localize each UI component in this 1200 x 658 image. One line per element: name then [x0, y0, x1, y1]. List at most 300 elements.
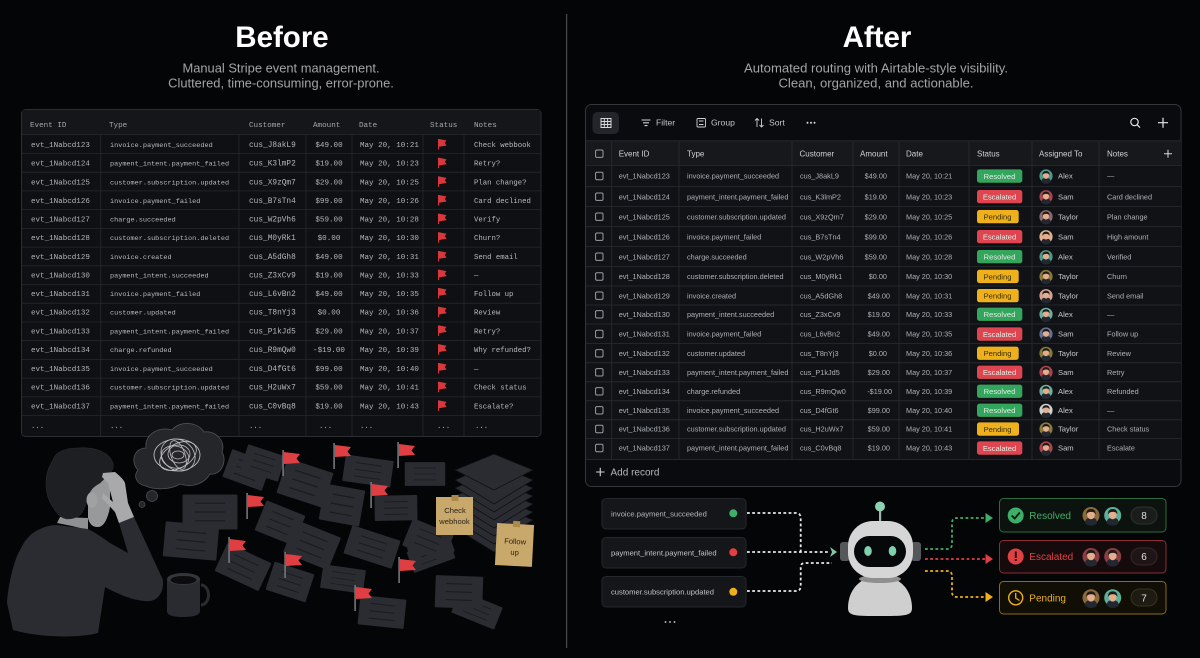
- record 127: May 20, 10:28: [906, 252, 952, 261]
- record 124: Sam: [1058, 192, 1074, 201]
- record 125: May 20, 10:25: [906, 212, 952, 221]
- row 125: Plan change?: [474, 179, 527, 187]
- row 125: evt_1Nabcd125: [31, 179, 90, 187]
- record 135: evt_1Nabcd135: [619, 406, 670, 415]
- hair: [46, 448, 113, 519]
- row 123: invoice.payment_succeeded: [110, 142, 213, 150]
- record 134: Resolved: [984, 387, 1015, 396]
- row 135: invoice.payment_succeeded: [110, 366, 213, 374]
- head: [848, 521, 913, 578]
- row 123: cus_J8akL9: [249, 142, 296, 150]
- row 127: Verify: [474, 217, 501, 225]
- row 123: May 20, 10:21: [360, 142, 419, 150]
- record 130: —: [1107, 310, 1115, 319]
- record 126: Sam: [1058, 232, 1074, 241]
- subtitle: After: Automated routing with Airtable-style visibility.: [744, 60, 1008, 76]
- row 131: evt_1Nabcd131: [31, 291, 90, 299]
- row 127: cus_W2pVh6: [249, 217, 296, 225]
- subtitle: After: [744, 60, 1008, 90]
- event chip: customer.subscription.updated: customer.subscription.updated: [611, 588, 714, 596]
- hand on head: [102, 472, 134, 523]
- row 128: $0.00: [318, 235, 341, 243]
- row 134: Why refunded?: [474, 347, 531, 355]
- toolbar: [592, 112, 1168, 134]
- row 130: evt_1Nabcd130: [31, 273, 90, 281]
- row 130: payment_intent.succeeded: [110, 273, 209, 281]
- eyes: [864, 546, 896, 556]
- record 128: Pending: [984, 272, 1011, 281]
- record 128: Taylor: [1058, 272, 1079, 281]
- row 131: $49.00: [315, 291, 343, 299]
- routing arrow: resolved: [925, 513, 993, 549]
- row 132: customer.updated: [110, 310, 176, 318]
- row 135: $99.00: [315, 366, 343, 374]
- row 135: cus_D4fGt6: [249, 366, 296, 374]
- record 128: evt_1Nabcd128: [619, 272, 670, 281]
- row 126: invoice.payment_failed: [110, 198, 200, 206]
- flags: [228, 442, 416, 611]
- row 129: Send email: [474, 254, 518, 262]
- arrow into robot: [830, 547, 837, 557]
- row 125: [31, 176, 527, 187]
- event chip: customer.subscription.updated: [602, 576, 746, 607]
- record 136: cus_H2uWx7: [800, 425, 843, 434]
- record 136: Taylor: [1058, 425, 1079, 434]
- truncated row: ...: [319, 423, 332, 431]
- row 133: evt_1Nabcd133: [31, 328, 90, 336]
- face: [88, 477, 110, 527]
- scribble in cloud: [154, 432, 201, 478]
- record 135: invoice.payment_succeeded: [687, 406, 779, 415]
- row 132: Review: [474, 310, 501, 318]
- sticky note: check webhook: [436, 495, 473, 535]
- record 137: Escalated: [983, 444, 1016, 453]
- outcome card: escalated: Escalated: [1029, 552, 1073, 563]
- record 124: payment_intent.payment_failed: [687, 192, 788, 201]
- record 123: Resolved: [984, 172, 1015, 181]
- record 131: Escalated: [983, 330, 1016, 339]
- record 132: $0.00: [869, 349, 887, 358]
- record 126: $99.00: [865, 232, 887, 241]
- record 136: May 20, 10:41: [906, 425, 952, 434]
- row 137: $19.00: [315, 403, 343, 411]
- row 131: [31, 288, 513, 299]
- table: Airtable-style view: [586, 104, 1181, 486]
- subtitle: Before: Manual Stripe event management.: [182, 60, 380, 76]
- illustration: stressed person: [7, 423, 224, 636]
- row 132: [31, 307, 501, 318]
- row 133: May 20, 10:37: [360, 328, 419, 336]
- row 126: evt_1Nabcd126: [31, 198, 90, 206]
- row 123: $49.00: [315, 142, 343, 150]
- row 123: Check webbook: [474, 142, 532, 150]
- record 135: Resolved: [984, 406, 1015, 415]
- filter control: [642, 118, 675, 128]
- outcome card: pending: Pending: [1029, 593, 1066, 604]
- row 127: charge.succeeded: [110, 217, 176, 225]
- table header row: Customer: [800, 150, 835, 159]
- robot: [840, 502, 921, 616]
- row 125: customer.subscription.updated: [110, 179, 229, 187]
- record 135: Alex: [1058, 406, 1073, 415]
- record 129: $49.00: [868, 291, 890, 300]
- record 134: cus_R9mQw0: [800, 387, 846, 396]
- row 137: Escalate?: [474, 403, 513, 411]
- record 133: [596, 366, 1125, 380]
- record 127: $59.00: [865, 252, 887, 261]
- row 137: cus_C0vBq8: [249, 403, 296, 411]
- sticky note: follow up: up: [510, 548, 519, 557]
- row 130: May 20, 10:33: [360, 273, 419, 281]
- row 134: May 20, 10:39: [360, 347, 419, 355]
- table header row: Event ID: [30, 122, 67, 130]
- record 128: May 20, 10:30: [906, 272, 952, 281]
- row 124: evt_1Nabcd124: [31, 161, 90, 169]
- record 124: [596, 190, 1152, 205]
- row 133: Retry?: [474, 328, 500, 336]
- record 132: Review: [1107, 349, 1132, 358]
- row 131: cus_L6vBn2: [249, 291, 296, 299]
- record 130: May 20, 10:33: [906, 310, 952, 319]
- record 136: [596, 422, 1150, 437]
- row 129: [31, 251, 518, 262]
- outcome card: pending: [1000, 582, 1166, 614]
- record 131: evt_1Nabcd131: [619, 330, 670, 339]
- record 131: Sam: [1058, 330, 1074, 339]
- more events ellipsis: [665, 621, 675, 623]
- row 123: evt_1Nabcd123: [31, 142, 90, 150]
- subtitle: Before: [168, 60, 394, 90]
- record 125: $29.00: [865, 212, 887, 221]
- record 124: cus_K3lmP2: [800, 192, 841, 201]
- row 134: evt_1Nabcd134: [31, 347, 90, 355]
- truncated row: ...: [475, 423, 488, 431]
- record 128: [596, 270, 1127, 284]
- record 130: Resolved: [984, 310, 1015, 319]
- record 123: evt_1Nabcd123: [619, 172, 670, 181]
- row 136: customer.subscription.updated: [110, 385, 229, 393]
- row 124: cus_K3lmP2: [249, 161, 296, 169]
- record 125: evt_1Nabcd125: [619, 212, 670, 221]
- routing arrow: pending: [925, 571, 993, 602]
- row 133: cus_P1kJd5: [249, 328, 296, 336]
- record 128: Churn: [1107, 272, 1127, 281]
- record 123: Alex: [1058, 172, 1073, 181]
- row 125: $29.00: [315, 179, 343, 187]
- row 127: [31, 214, 501, 225]
- heading: After: After: [843, 21, 912, 54]
- row 132: $0.00: [318, 310, 341, 318]
- record 127: cus_W2pVh6: [800, 252, 843, 261]
- record 130: payment_intent.succeeded: [687, 310, 774, 319]
- record 125: Plan change: [1107, 212, 1148, 221]
- record 134: Refunded: [1107, 387, 1139, 396]
- row 125: cus_X9zQm7: [249, 179, 296, 187]
- body: [848, 576, 912, 616]
- record 135: May 20, 10:40: [906, 406, 952, 415]
- truncated row: [31, 423, 488, 431]
- row 136: $59.00: [315, 385, 343, 393]
- sticky note: follow up: Follow: [504, 536, 527, 547]
- record 125: [596, 210, 1148, 225]
- record 123: cus_J8akL9: [800, 172, 839, 181]
- record 134: -$19.00: [867, 387, 892, 396]
- record 129: cus_A5dGh8: [800, 291, 842, 300]
- record 134: evt_1Nabcd134: [619, 387, 670, 396]
- record 137: Sam: [1058, 444, 1074, 453]
- row 129: May 20, 10:31: [360, 254, 419, 262]
- group control: Group: [711, 118, 735, 128]
- record 132: Pending: [984, 349, 1011, 358]
- row 128: customer.subscription.deleted: [110, 235, 229, 243]
- ears: [840, 542, 921, 561]
- row 128: cus_M0yRk1: [249, 235, 296, 243]
- row 125: May 20, 10:25: [360, 179, 419, 187]
- record 129: May 20, 10:31: [906, 291, 952, 300]
- record 130: cus_Z3xCv9: [800, 310, 841, 319]
- record 133: cus_P1kJd5: [800, 368, 840, 377]
- row 124: May 20, 10:23: [360, 161, 419, 169]
- record 133: Retry: [1107, 368, 1125, 377]
- row 126: May 20, 10:26: [360, 198, 419, 206]
- row 127: May 20, 10:28: [360, 217, 419, 225]
- record 132: cus_T8nYj3: [800, 349, 839, 358]
- record 127: Verified: [1107, 252, 1131, 261]
- record 127: Alex: [1058, 252, 1073, 261]
- record 137: May 20, 10:43: [906, 444, 952, 453]
- event chip: invoice.payment_succeeded: invoice.payment_succeeded: [611, 510, 707, 518]
- table header row: Date: [906, 150, 923, 159]
- grid view button: [592, 112, 619, 134]
- table header row: Notes: [474, 122, 497, 130]
- record 127: charge.succeeded: [687, 252, 747, 261]
- outcome card: resolved: 8: [1141, 511, 1147, 522]
- filter control: Filter: [656, 118, 675, 128]
- record 133: payment_intent.payment_failed: [687, 368, 788, 377]
- record 130: $19.00: [868, 310, 890, 319]
- record 126: High amount: [1107, 232, 1148, 241]
- record 129: Pending: [984, 292, 1011, 300]
- record 126: May 20, 10:26: [906, 232, 952, 241]
- outcome card: resolved: [1000, 498, 1166, 532]
- visor: [854, 536, 906, 567]
- record 128: cus_M0yRk1: [800, 272, 842, 281]
- table: manual event log: [22, 110, 541, 436]
- record 123: —: [1107, 172, 1115, 181]
- record 127: [596, 250, 1131, 265]
- record 134: May 20, 10:39: [906, 387, 952, 396]
- neck shadow: [859, 575, 901, 583]
- record 125: Pending: [984, 212, 1011, 222]
- record 132: Taylor: [1058, 349, 1079, 358]
- record 130: evt_1Nabcd130: [619, 310, 670, 319]
- row 128: Churn?: [474, 235, 500, 243]
- record 130: [596, 308, 1115, 322]
- row 129: evt_1Nabcd129: [31, 254, 90, 262]
- sort control: [755, 118, 785, 128]
- record 133: May 20, 10:37: [906, 368, 952, 377]
- record 126: [596, 230, 1148, 245]
- row 130: —: [473, 273, 479, 281]
- row 134: [31, 344, 531, 355]
- record 137: payment_intent.payment_failed: [687, 444, 788, 453]
- row 129: cus_A5dGh8: [249, 254, 296, 262]
- record 133: evt_1Nabcd133: [619, 368, 670, 377]
- record 136: Check status: [1107, 425, 1150, 434]
- neck: [57, 517, 88, 530]
- record 123: [596, 169, 1115, 184]
- record 123: May 20, 10:21: [906, 172, 952, 181]
- row 134: -$19.00: [313, 347, 345, 355]
- record 133: $29.00: [868, 368, 890, 377]
- table header row: [30, 122, 497, 130]
- record 124: Card declined: [1107, 192, 1152, 201]
- record 131: May 20, 10:35: [906, 330, 952, 339]
- outcome card: pending: 7: [1141, 593, 1147, 604]
- ear: [86, 492, 98, 508]
- sticky note: check webhook: webhook: [438, 517, 470, 526]
- record 125: Taylor: [1058, 212, 1079, 221]
- table header row: Assigned To: [1039, 150, 1083, 159]
- event chip: payment_intent.payment_failed: [602, 538, 746, 568]
- row 133: $29.00: [315, 328, 343, 336]
- row 128: May 20, 10:30: [360, 235, 419, 243]
- record 135: [596, 404, 1115, 418]
- event chip: payment_intent.payment_failed: payment_intent.payment_failed: [611, 548, 717, 558]
- record 137: cus_C0vBq8: [800, 444, 841, 453]
- record 133: Escalated: [983, 368, 1016, 377]
- record 131: invoice.payment_failed: [687, 330, 761, 339]
- row 129: $49.00: [315, 254, 343, 262]
- row 134: charge.refunded: [110, 347, 172, 355]
- row 135: evt_1Nabcd135: [31, 366, 90, 374]
- truncated row: ...: [110, 423, 123, 431]
- row 124: $19.00: [315, 161, 343, 169]
- table header row: Type: [109, 122, 128, 130]
- row 128: [31, 232, 500, 243]
- record 129: invoice.created: [687, 291, 736, 300]
- record 135: $99.00: [868, 406, 890, 415]
- row 132: evt_1Nabcd132: [31, 310, 90, 318]
- table header row: Status: [430, 122, 457, 130]
- row 133: [31, 325, 500, 336]
- record 137: [596, 441, 1135, 456]
- routing arrow: escalated: [925, 554, 993, 564]
- row 127: evt_1Nabcd127: [31, 217, 90, 225]
- record 127: evt_1Nabcd127: [619, 252, 670, 261]
- sort control: Sort: [769, 118, 785, 128]
- truncated row: ...: [249, 423, 262, 431]
- record 128: $0.00: [869, 272, 887, 281]
- record 131: $49.00: [868, 330, 890, 339]
- outcome card: escalated: [1000, 540, 1166, 573]
- more menu: [806, 122, 816, 124]
- paper scatter: [163, 444, 503, 630]
- row 135: May 20, 10:40: [360, 366, 419, 374]
- row 136: May 20, 10:41: [360, 385, 419, 393]
- row 130: $19.00: [315, 273, 343, 281]
- row 133: payment_intent.payment_failed: [110, 328, 229, 336]
- record 132: customer.updated: [687, 349, 745, 358]
- sticky note: check webhook: Check: [444, 506, 466, 515]
- record 137: $19.00: [868, 444, 890, 453]
- record 133: Sam: [1058, 368, 1074, 377]
- row 135: [31, 363, 479, 374]
- row 132: May 20, 10:36: [360, 310, 419, 318]
- thought bubbles: [139, 490, 158, 508]
- row 137: payment_intent.payment_failed: [110, 403, 229, 411]
- row 129: invoice.created: [110, 254, 172, 262]
- record 124: May 20, 10:23: [906, 192, 952, 201]
- row 124: payment_intent.payment_failed: [110, 161, 229, 169]
- row 131: invoice.payment_failed: [110, 291, 200, 299]
- record 127: Resolved: [984, 252, 1015, 262]
- row 137: evt_1Nabcd137: [31, 403, 90, 411]
- record 136: customer.subscription.updated: [687, 425, 786, 434]
- row 124: Retry?: [474, 161, 500, 169]
- table header row: Date: [359, 122, 378, 130]
- record 137: evt_1Nabcd137: [619, 444, 670, 453]
- record 129: Taylor: [1058, 291, 1079, 300]
- row 130: cus_Z3xCv9: [249, 273, 296, 281]
- event chip: invoice.payment_succeeded: [602, 498, 746, 529]
- record 129: Send email: [1107, 291, 1144, 300]
- group control: [697, 118, 735, 128]
- row 126: Card declined: [474, 198, 531, 206]
- table header row: Type: [687, 150, 705, 159]
- thought cloud: [134, 423, 224, 489]
- add icon: [1158, 118, 1168, 128]
- record 134: charge.refunded: [687, 387, 740, 396]
- record 126: invoice.payment_failed: [687, 232, 761, 241]
- row 130: [31, 270, 479, 281]
- table header row: Status: [977, 150, 1000, 159]
- row 131: Follow up: [474, 291, 513, 299]
- row 135: —: [473, 366, 479, 374]
- table header row: Event ID: [619, 150, 650, 159]
- row 126: [31, 195, 531, 206]
- outcome card: resolved: Resolved: [1029, 511, 1071, 522]
- truncated row: ...: [31, 423, 44, 431]
- table header row: Notes: [1107, 150, 1128, 159]
- record 126: Escalated: [983, 232, 1016, 242]
- dotted connectors into robot: [747, 513, 832, 591]
- row 123: [31, 139, 532, 150]
- record 131: Follow up: [1107, 330, 1138, 339]
- record 132: [596, 347, 1132, 361]
- record 123: invoice.payment_succeeded: [687, 172, 779, 181]
- row 136: cus_H2uWx7: [249, 385, 296, 393]
- record 132: May 20, 10:36: [906, 349, 952, 358]
- row 132: cus_T8nYj3: [249, 310, 296, 318]
- outcome card: escalated: 6: [1141, 552, 1147, 563]
- table header row: Amount: [860, 150, 888, 159]
- table header row: Customer: [249, 122, 285, 130]
- row 126: $99.00: [315, 198, 343, 206]
- table header row: [596, 150, 1172, 159]
- row 136: evt_1Nabcd136: [31, 385, 90, 393]
- record 137: Escalate: [1107, 444, 1135, 453]
- center divider: [566, 14, 567, 648]
- record 135: cus_D4fGt6: [800, 406, 839, 415]
- record 126: cus_B7sTn4: [800, 232, 841, 241]
- add record row: Add record: [610, 468, 659, 479]
- table header row: Amount: [313, 122, 340, 130]
- sticky note: follow up: [495, 520, 534, 567]
- row 127: $59.00: [315, 217, 343, 225]
- row 137: [31, 400, 513, 411]
- row 136: Check status: [474, 385, 527, 393]
